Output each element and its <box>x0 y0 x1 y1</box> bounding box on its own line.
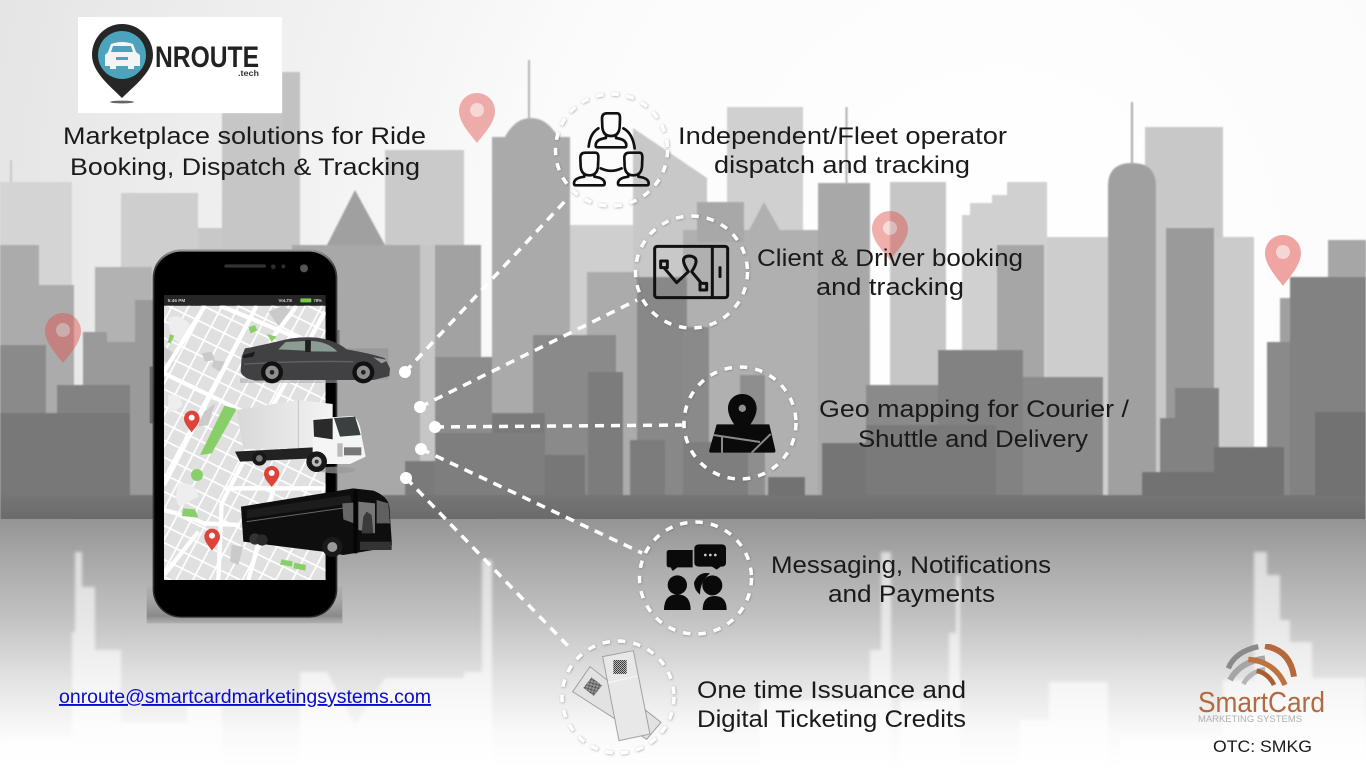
dashed circle <box>562 641 674 753</box>
label <box>819 396 1129 453</box>
label: Client & Driver booking <box>757 245 1023 272</box>
label: and tracking <box>816 274 964 301</box>
label: dispatch and tracking <box>714 152 970 179</box>
icon: people chatting <box>664 544 727 610</box>
ticker: OTC: SMKG <box>1213 737 1312 756</box>
item 5: ticketing <box>562 641 966 753</box>
label: One time Issuance and <box>697 677 966 704</box>
item 1: dispatch <box>556 94 1007 206</box>
label <box>678 123 1007 179</box>
side buttons <box>150 367 153 423</box>
dashed connectors <box>405 198 683 648</box>
label: Digital Ticketing Credits <box>697 706 966 733</box>
emblem ribbons <box>1228 646 1294 685</box>
dashed circle <box>556 94 668 206</box>
dashed circle <box>636 216 748 328</box>
item 4: messaging <box>640 522 1051 634</box>
background: skyline reflection <box>0 552 1366 768</box>
smartphone with map <box>147 249 392 623</box>
heading: Booking, Dispatch & Tracking <box>70 154 420 181</box>
status bar: 5:46 PM <box>168 298 185 303</box>
icon: tablet with route <box>655 246 728 298</box>
vehicle: car <box>240 337 392 383</box>
status bar: VoLTE <box>278 298 292 303</box>
dashed circle <box>640 522 752 634</box>
red map pins <box>184 411 279 551</box>
map pin: centre right <box>872 211 908 260</box>
vehicle: bus <box>241 488 392 557</box>
contact email: onroute@smartcardmarketingsystems.com <box>59 687 431 708</box>
map pin: left <box>45 313 81 363</box>
label: Independent/Fleet operator <box>678 123 1007 150</box>
icon: three people <box>574 113 649 185</box>
logo pin <box>92 24 153 103</box>
heading: Marketplace solutions for Ride <box>63 123 426 150</box>
vehicle: truck <box>235 400 366 473</box>
label: Shuttle and Delivery <box>858 426 1088 453</box>
label: Messaging, Notifications <box>771 552 1051 579</box>
dashed circle <box>684 367 796 479</box>
item 3: geo mapping <box>684 367 1129 479</box>
icon: QR tickets <box>573 651 661 741</box>
item 2: booking <box>636 216 1023 328</box>
logo: SmartCard <box>1198 646 1325 724</box>
logo wordmark: NROUTE <box>155 41 259 74</box>
icon: map with pin <box>709 394 775 453</box>
logo suffix: .tech <box>238 69 259 78</box>
label <box>697 677 966 733</box>
phone body <box>153 249 337 618</box>
status bar: 78% <box>313 298 322 303</box>
map <box>164 306 327 580</box>
label <box>757 245 1023 301</box>
map pin: top centre <box>459 93 495 143</box>
label: and Payments <box>828 581 995 608</box>
status bar <box>164 295 326 306</box>
speaker and camera <box>224 264 308 272</box>
map pin: far right <box>1265 235 1301 286</box>
label: Geo mapping for Courier / <box>819 396 1129 423</box>
label <box>771 552 1051 608</box>
connector dots <box>399 366 441 484</box>
emblem tagline: MARKETING SYSTEMS <box>1198 714 1302 724</box>
emblem wordmark: SmartCard <box>1198 687 1325 719</box>
heading <box>63 123 426 181</box>
logo: OnRoute <box>78 17 282 113</box>
phone shadow <box>147 587 342 623</box>
